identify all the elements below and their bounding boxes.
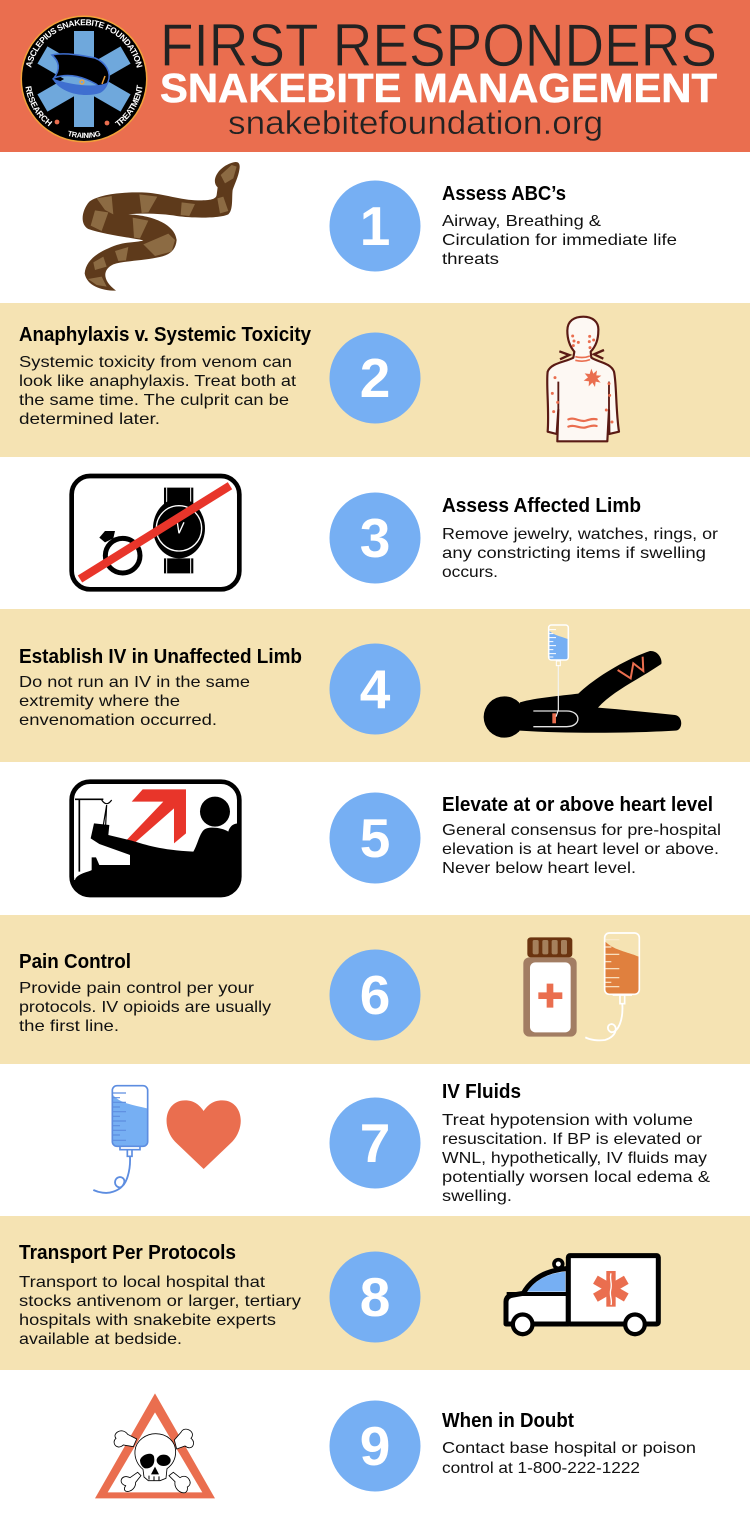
body text: Systemic toxicity from venom can [19, 354, 292, 371]
icon: snake [83, 162, 240, 291]
number badge 4: 4 [360, 658, 391, 720]
number badge 7: 7 [360, 1112, 390, 1174]
logo: Asclepius Snakebite Foundation: TREATMENT [114, 84, 142, 126]
body text: control at 1-800-222-1222 [442, 1460, 640, 1477]
body text: Airway, Breathing & [442, 213, 601, 230]
panel: step 2 [0, 303, 750, 457]
body text: determined later. [19, 411, 160, 428]
number badge 6 [330, 950, 420, 1040]
number badge 1: 1 [360, 195, 390, 257]
icon: heart [167, 1100, 241, 1169]
panel: step 7 [0, 1064, 750, 1216]
body text: Treat hypotension with volume [442, 1112, 693, 1129]
number badge 3 [330, 492, 420, 584]
heading: Pain Control [19, 951, 131, 973]
panel: step 1 [0, 152, 750, 303]
heading: Assess Affected Limb [442, 495, 641, 517]
number badge 5: 5 [360, 807, 390, 869]
body text: General consensus for pre-hospital [442, 822, 721, 839]
icon: patient with IV in unaffected arm [484, 625, 681, 738]
body text: stocks antivenom or larger, tertiary [19, 1293, 301, 1310]
body text: resuscitation. If BP is elevated or [442, 1131, 703, 1148]
body text [19, 674, 250, 729]
heading: IV Fluids [442, 1081, 521, 1103]
logo: Asclepius Snakebite Foundation: ASCLEPIUS SNAKEBITE FOUNDATION [26, 19, 142, 68]
body text: potentially worsen local edema & [442, 1169, 710, 1186]
number badge 9 [330, 1400, 420, 1492]
body text: Provide pain control per your [19, 980, 255, 997]
body text: any constricting items if swelling [442, 545, 706, 562]
body text: Transport to local hospital that [19, 1274, 266, 1291]
heading: Anaphylaxis v. Systemic Toxicity [19, 324, 312, 346]
body text: Do not run an IV in the same [19, 674, 250, 691]
heading: When in Doubt [442, 1410, 574, 1432]
body text: envenomation occurred. [19, 712, 217, 729]
body text: swelling. [442, 1188, 512, 1205]
panel: step 4 [0, 609, 750, 762]
body text: Circulation for immediate life [442, 232, 677, 249]
subtitle: SNAKEBITE MANAGEMENT [160, 65, 717, 111]
icon: pill bottle and IV bag [523, 933, 639, 1040]
body text: available at bedside. [19, 1331, 182, 1348]
body text [442, 526, 719, 581]
body text [19, 1274, 301, 1348]
body text [19, 354, 297, 428]
number badge 1 [330, 180, 420, 272]
icon: body with symptoms [547, 317, 619, 441]
number badge 8: 8 [360, 1266, 390, 1328]
panel: step 8 [0, 1216, 750, 1370]
body text: the first line. [19, 1018, 119, 1035]
panel: step 5 [0, 762, 750, 915]
body text [19, 980, 271, 1035]
body text [442, 1440, 696, 1477]
heading: Transport Per Protocols [19, 1242, 236, 1264]
body text: occurs. [442, 564, 498, 581]
number badge 7 [330, 1098, 420, 1188]
number badge 9: 9 [360, 1415, 390, 1477]
number badge 2 [330, 332, 420, 424]
body text [442, 213, 677, 268]
body text: the same time. The culprit can be [19, 392, 289, 409]
heading: Elevate at or above heart level [442, 794, 713, 816]
icon: IV bag [93, 1086, 148, 1193]
icon: skull warning triangle [95, 1393, 215, 1498]
body text: Remove jewelry, watches, rings, or [442, 526, 719, 543]
body text: extremity where the [19, 693, 180, 710]
number badge 4 [330, 644, 420, 734]
icon: no watches or rings [72, 476, 239, 589]
number badge 6: 6 [360, 964, 390, 1026]
body text: elevation is at heart level or above. [442, 841, 719, 858]
body text [442, 822, 721, 877]
logo: Asclepius Snakebite Foundation: TRAINING [68, 130, 100, 138]
logo: Asclepius Snakebite Foundation [20, 16, 148, 142]
heading: Establish IV in Unaffected Limb [19, 646, 302, 668]
panel: step 3 [0, 457, 750, 609]
body text: protocols. IV opioids are usually [19, 999, 271, 1016]
website: snakebitefoundation.org [228, 104, 603, 141]
body text: hospitals with snakebite experts [19, 1312, 276, 1329]
body text: WNL, hypothetically, IV fluids may [442, 1150, 707, 1167]
panel: step 9 [0, 1370, 750, 1522]
body text [442, 1112, 710, 1205]
number badge 3: 3 [360, 507, 390, 569]
heading: Assess ABC’s [442, 183, 566, 205]
body text: look like anaphylaxis. Treat both at [19, 373, 297, 390]
panel: step 6 [0, 915, 750, 1064]
body text: threats [442, 251, 499, 268]
body text: Never below heart level. [442, 860, 636, 877]
body text: Contact base hospital or poison [442, 1440, 696, 1457]
number badge 8 [330, 1252, 420, 1342]
icon: ambulance [506, 1256, 658, 1336]
number badge 5 [330, 792, 420, 884]
icon: elevated limb [72, 782, 239, 895]
logo: Asclepius Snakebite Foundation: RESEARCH [26, 86, 52, 126]
header banner [0, 0, 750, 152]
number badge 2: 2 [360, 347, 390, 409]
